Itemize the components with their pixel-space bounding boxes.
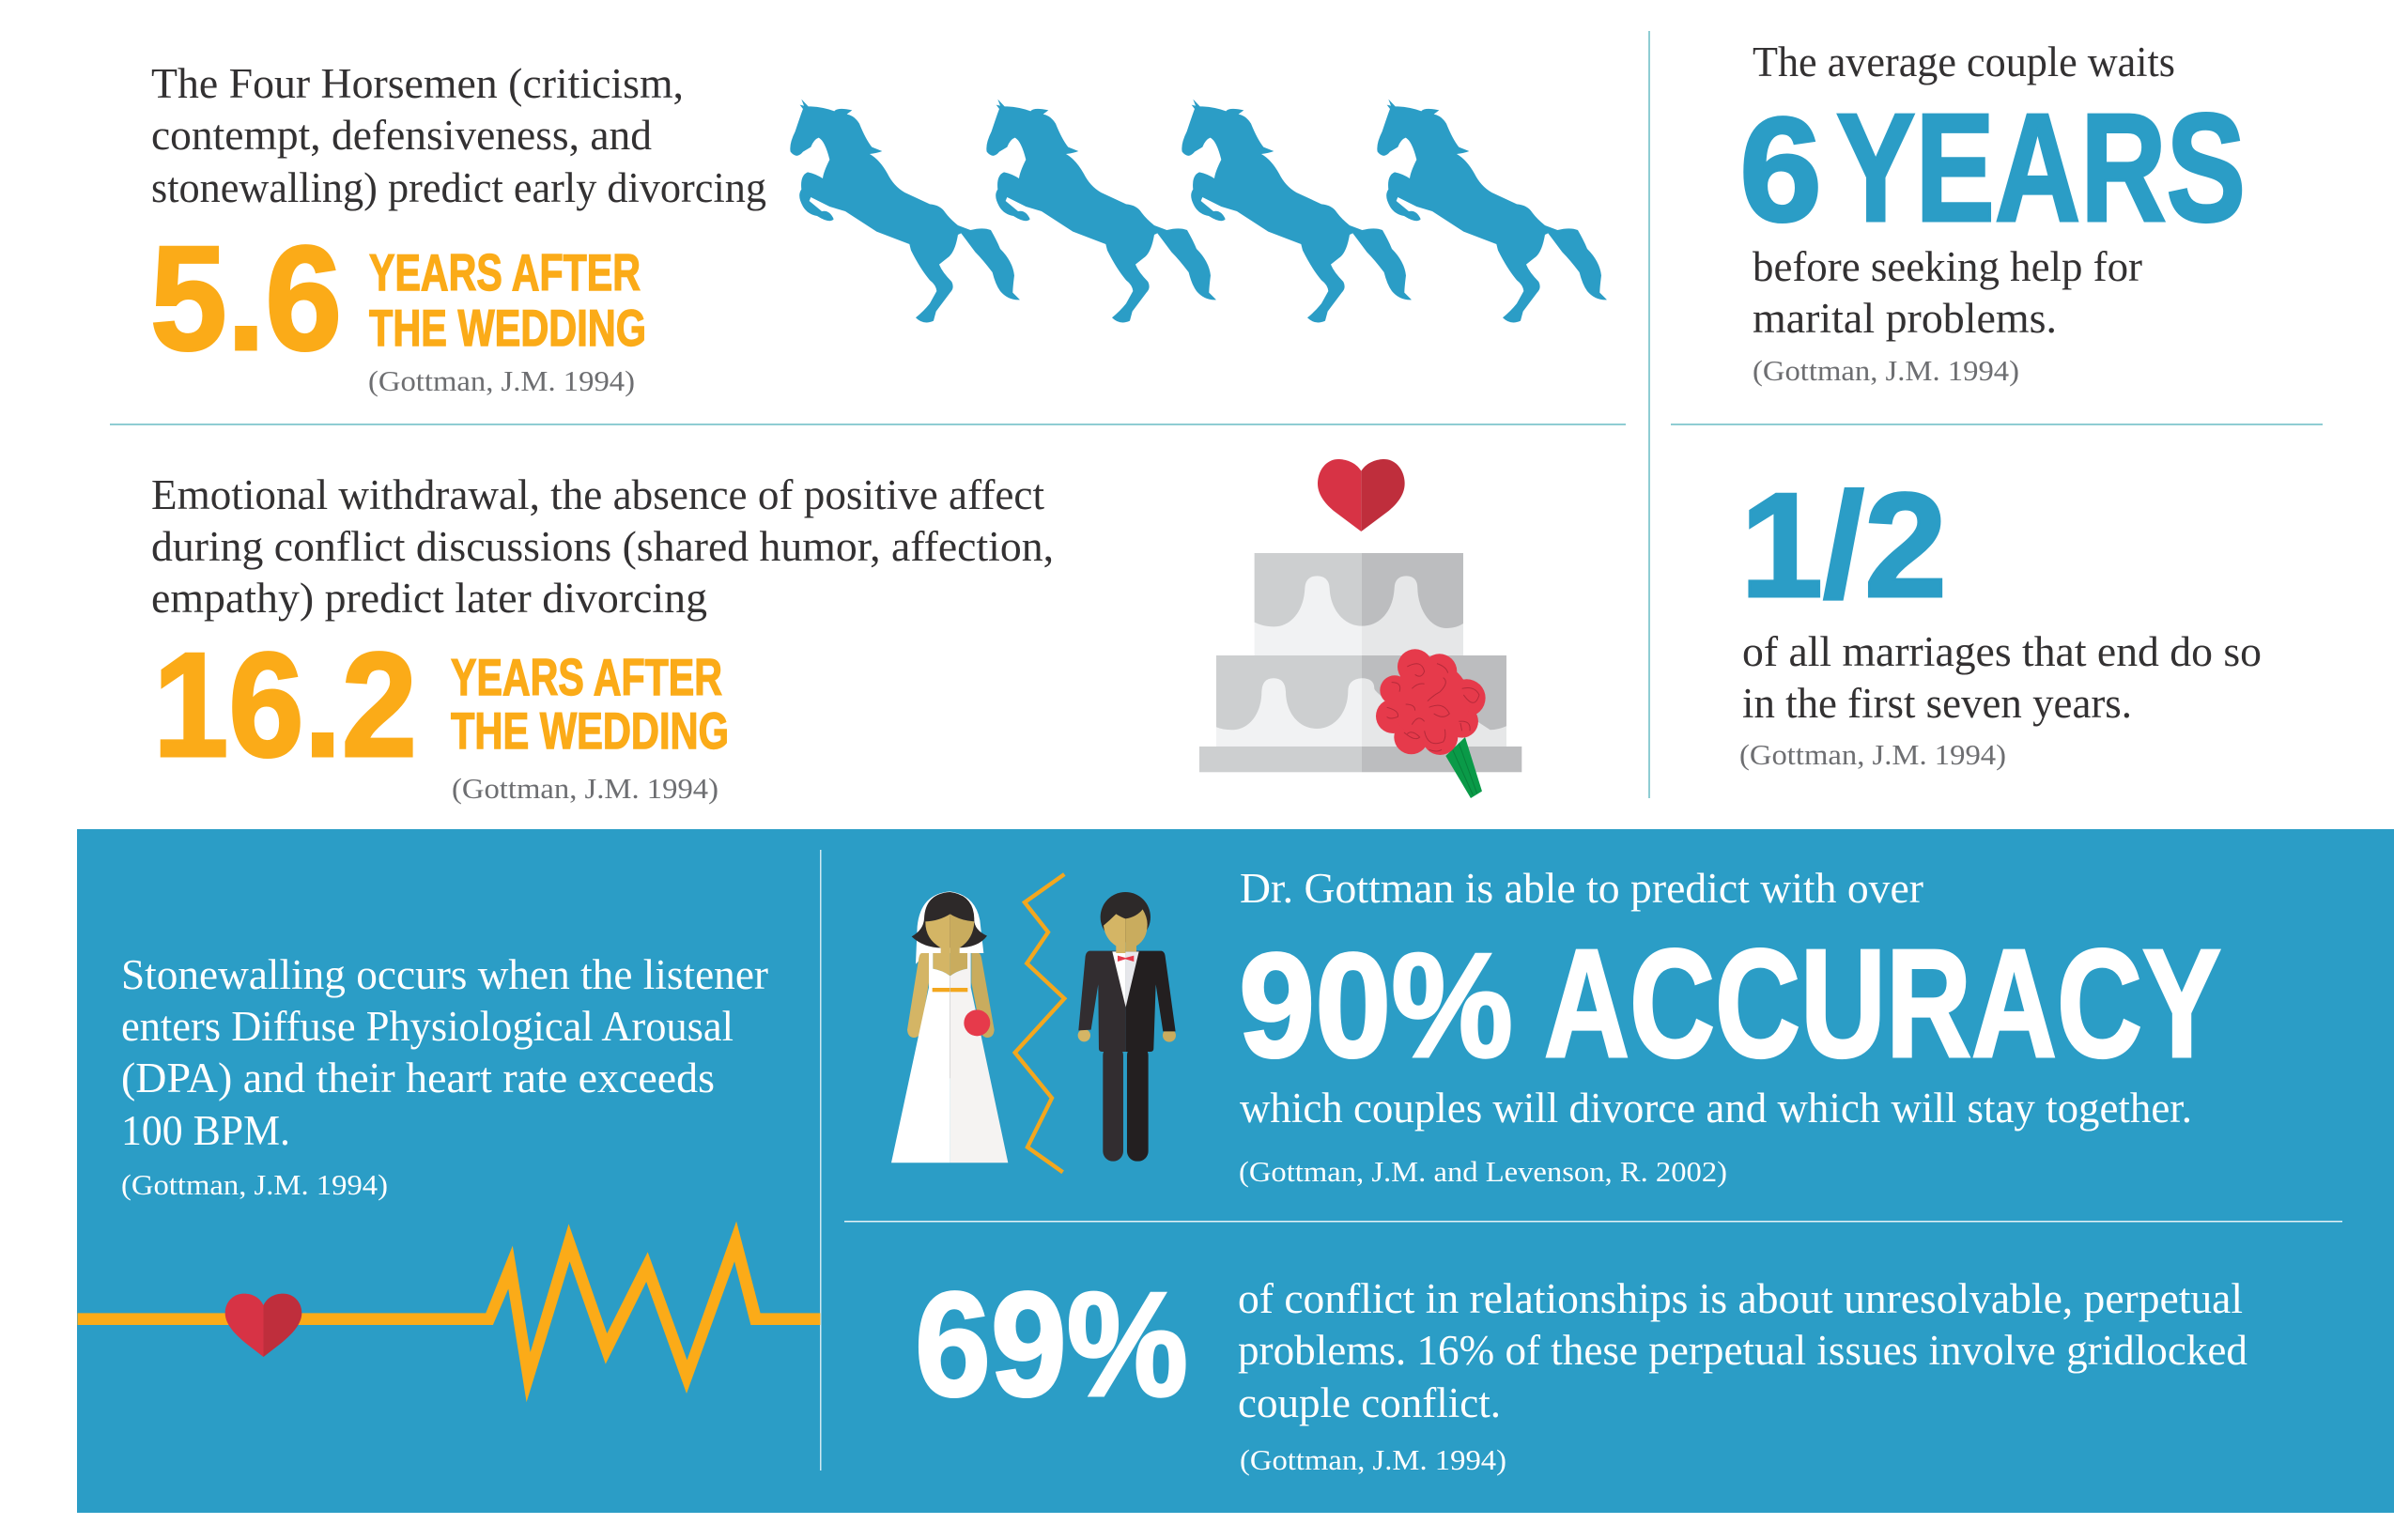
text: stonewalling description: 100 BPM. [121, 1107, 290, 1154]
panel: blue band [77, 829, 2394, 1513]
citation: (Gottman, J.M. 1994) [1753, 354, 2019, 387]
citation: (Gottman, J.M. 1994) [1739, 738, 2006, 771]
text: four horsemen description: The Four Horsemen (criticism, [151, 60, 684, 107]
icon: four leaping horses [790, 100, 1607, 323]
text: before seeking help: before seeking help for [1753, 243, 2142, 290]
stat label: years after the wedding [451, 648, 729, 760]
stat: 16.2: 16.2 [153, 623, 417, 788]
citation: (Gottman, J.M. 1994) [452, 772, 718, 805]
stat: 90% accuracy: 90% [1239, 923, 1513, 1088]
icon: wedding cake with heart and bouquet [1199, 459, 1521, 798]
text: emotional withdrawal description: during conflict discussions (shared humor, affection, [151, 523, 1054, 570]
text: before seeking help: marital problems. [1753, 295, 2057, 342]
icon: bride and groom split by a zigzag [891, 874, 1176, 1172]
text: perpetual conflict description: couple conflict. [1238, 1379, 1501, 1426]
text: four horsemen description: contempt, defensiveness, and [151, 112, 652, 159]
text: emotional withdrawal description: Emotional withdrawal, the absence of positive affect [151, 471, 1044, 518]
text: four horsemen description [151, 60, 766, 211]
text: marriages that end [1742, 628, 2262, 727]
text: perpetual conflict description: of conflict in relationships is about unresolvable, perpetual [1238, 1275, 2243, 1322]
text: average couple waits: The average couple waits [1753, 38, 2175, 85]
stat: 1/2: 1/2 [1740, 463, 1947, 628]
text: stonewalling description: Stonewalling occurs when the listener [121, 951, 768, 998]
panel: four horsemen [150, 60, 1607, 397]
text: stonewalling description [121, 951, 768, 1154]
text: marriages that end: in the first seven years. [1742, 680, 2132, 727]
stat: 5.6: 5.6 [150, 216, 342, 381]
stat: 6 years [1739, 82, 2246, 254]
stat label: years after the wedding: THE WEDDING [369, 299, 646, 357]
stat label: years after the wedding [369, 243, 646, 357]
panel: emotional withdrawal [151, 459, 1521, 805]
citation: (Gottman, J.M. 1994) [368, 364, 635, 397]
citation: (Gottman, J.M. 1994) [121, 1168, 388, 1201]
citation: (Gottman, J.M. 1994) [1240, 1443, 1506, 1476]
groom [1078, 892, 1176, 1162]
text: before seeking help [1753, 243, 2142, 342]
zigzag crack [1015, 874, 1064, 1172]
stat: 69%: 69% [915, 1262, 1188, 1427]
citation: (Gottman, J.M. and Levenson, R. 2002) [1239, 1155, 1727, 1188]
text: emotional withdrawal description: empathy) predict later divorcing [151, 575, 707, 622]
panel: one half [1739, 463, 2262, 771]
text: prediction result: which couples will divorce and which will stay together. [1240, 1085, 2192, 1132]
stat: 90% accuracy [1239, 917, 2221, 1089]
chart: heartbeat line with heart [78, 1222, 820, 1402]
bride [891, 891, 1008, 1163]
stat: 6 years: YEARS [1836, 82, 2246, 254]
stat label: years after the wedding: YEARS AFTER [451, 648, 722, 706]
text: stonewalling description: (DPA) and their heart rate exceeds [121, 1055, 715, 1101]
stat: 6 years: 6 [1739, 87, 1822, 253]
stat label: years after the wedding: THE WEDDING [451, 701, 729, 760]
text: marriages that end: of all marriages that end do so [1742, 628, 2262, 675]
panel: six years [1739, 38, 2246, 387]
text: emotional withdrawal description [151, 471, 1054, 622]
text: four horsemen description: stonewalling) predict early divorcing [151, 164, 766, 211]
text: stonewalling description: enters Diffuse Physiological Arousal [121, 1003, 734, 1050]
text: perpetual conflict description [1238, 1275, 2247, 1426]
stat label: years after the wedding: YEARS AFTER [369, 243, 641, 301]
text: perpetual conflict description: problems. 16% of these perpetual issues involve gridlocked [1238, 1327, 2247, 1374]
text: prediction intro: Dr. Gottman is able to predict with over [1240, 865, 1923, 912]
